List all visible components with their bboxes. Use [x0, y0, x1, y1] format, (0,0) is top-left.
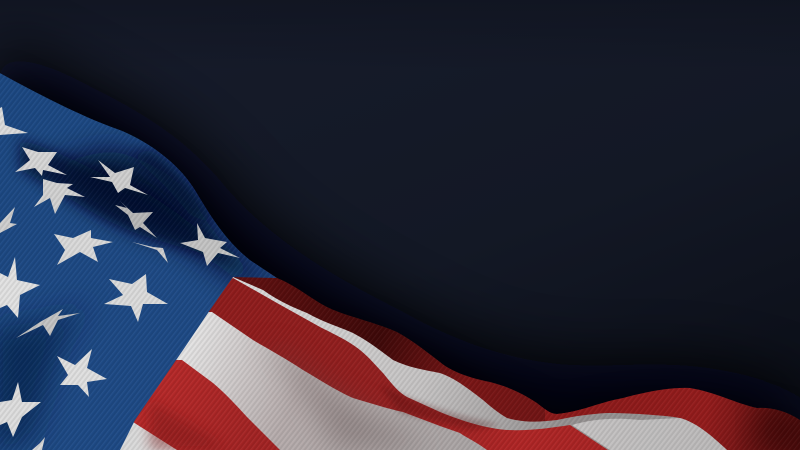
star 13 [57, 349, 107, 397]
star 9 [180, 223, 240, 266]
star 8 [132, 242, 168, 263]
star 5 [115, 201, 157, 238]
flag: first red stripe [180, 278, 608, 450]
star 14 [0, 382, 41, 437]
flag: right red stripe fold [545, 388, 800, 450]
star 11 [104, 274, 168, 322]
star 12 [16, 309, 80, 338]
flag: second white stripe [176, 312, 487, 450]
star 6 [0, 207, 17, 233]
flag: lower right white stripe [572, 418, 727, 450]
canton fold shadows [0, 140, 285, 450]
flag: top white stripe [212, 277, 727, 450]
flag: blue canton [0, 73, 285, 450]
star 10 [0, 257, 40, 318]
star 1 [0, 107, 28, 135]
flag: bottom white stripe [120, 422, 177, 450]
flag: far red stripe in shadow [232, 270, 580, 422]
star 15 [32, 437, 45, 450]
star 2 [15, 147, 67, 176]
star 3 [34, 179, 85, 214]
star 7 [54, 230, 113, 265]
flag: third red stripe [134, 360, 280, 450]
flag: shaded folds on stripes [142, 353, 800, 450]
star 4 [90, 160, 148, 195]
